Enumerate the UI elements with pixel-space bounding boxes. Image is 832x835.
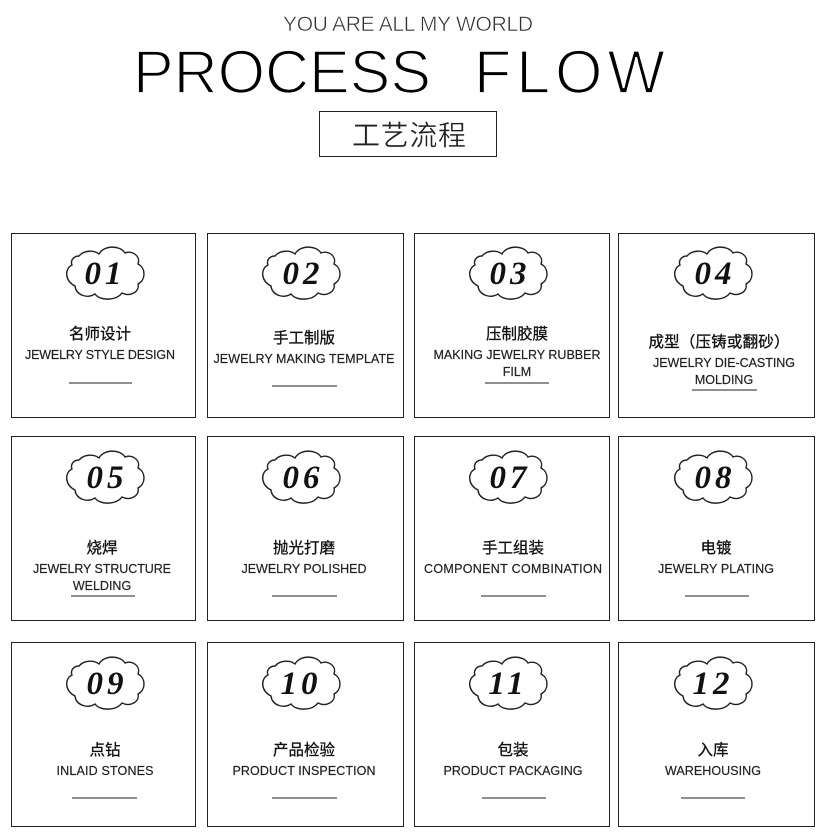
step 05 card: 05 [86, 460, 128, 496]
step 05 card: WELDING [73, 579, 131, 593]
step 08 card: JEWELRY PLATING [658, 562, 774, 576]
step 01 card: 名师设计 [69, 325, 131, 343]
step 04 card: 04 [694, 256, 736, 292]
step 01 card: JEWELRY STYLE DESIGN [25, 348, 175, 362]
step 05 card [12, 436, 196, 620]
step 09 card: 09 [86, 666, 128, 702]
step 03 card: 03 [490, 256, 530, 292]
step 11 card: 11 [488, 666, 528, 702]
step 10 card: 产品检验 [273, 741, 335, 759]
step 04 card: JEWELRY DIE-CASTING [653, 356, 795, 370]
step 06 card: 抛光打磨 [273, 539, 335, 557]
step 05 card: 烧焊 [86, 539, 118, 557]
step 08 card: 08 [694, 460, 736, 496]
step 06 card: JEWELRY POLISHED [242, 562, 366, 576]
step 01 card: 01 [84, 256, 126, 292]
step 08 card [618, 436, 814, 620]
step 09 card: 点钻 [89, 741, 121, 759]
step 03 card: FILM [503, 365, 531, 379]
chinese title box [320, 112, 496, 156]
step 03 card: 压制胶膜 [486, 325, 548, 343]
step 09 card: INLAID STONES [56, 764, 154, 778]
title: PROCESS [133, 38, 431, 106]
step 04 card: 成型（压铸或翻砂） [648, 333, 790, 351]
step 03 card: MAKING JEWELRY RUBBER [434, 348, 600, 362]
step 11 card: 包装 [497, 741, 529, 759]
step 12 card: WAREHOUSING [665, 764, 761, 778]
step 06 card: 06 [282, 460, 324, 496]
title [133, 38, 665, 106]
step 01 card [12, 234, 196, 418]
step 07 card: COMPONENT COMBINATION [424, 562, 602, 576]
step 07 card [414, 436, 610, 620]
step 12 card [618, 642, 814, 826]
step 12 card: 入库 [697, 741, 729, 759]
step 02 card: 02 [282, 256, 324, 292]
step 10 card: 10 [280, 666, 322, 702]
step 12 card: 12 [692, 666, 734, 702]
chinese title box: 工艺流程 [352, 120, 466, 151]
step 07 card: 07 [490, 460, 530, 496]
step 10 card [208, 642, 404, 826]
step 11 card: PRODUCT PACKAGING [444, 764, 582, 778]
step 03 card [414, 234, 610, 418]
step 11 card [414, 642, 610, 826]
step 08 card: 电镀 [700, 539, 732, 557]
step 06 card [208, 436, 404, 620]
step 10 card: PRODUCT INSPECTION [232, 764, 376, 778]
step 02 card: 手工制版 [273, 329, 335, 347]
step 05 card: JEWELRY STRUCTURE [33, 562, 171, 576]
step 02 card: JEWELRY MAKING TEMPLATE [214, 352, 394, 366]
step 09 card [12, 642, 196, 826]
tagline: YOU ARE ALL MY WORLD [283, 13, 533, 36]
step 07 card: 手工组装 [482, 539, 544, 557]
step 04 card: MOLDING [695, 373, 753, 387]
step 04 card [618, 234, 814, 418]
step 02 card [208, 234, 404, 418]
title: FLOW [474, 38, 665, 106]
